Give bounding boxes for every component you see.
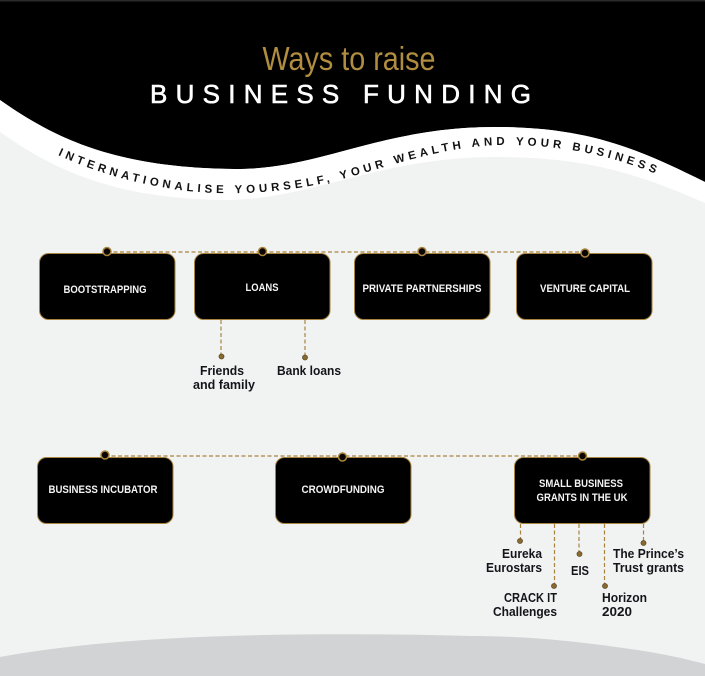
label: EIS: EIS	[571, 563, 589, 578]
label: Eureka Eurostars	[486, 546, 543, 575]
title: Ways to raise: Ways to raise	[262, 40, 436, 77]
box: Bootstrapping: BOOTSTRAPPING	[64, 284, 146, 296]
box: Bootstrapping	[40, 254, 175, 320]
connector lines	[105, 252, 644, 586]
label: Horizon 2020: 2020	[602, 604, 632, 619]
box: Small Business Grants in the UK: SMALL BUSINESS	[539, 478, 623, 490]
label: Friends and family: and family	[193, 377, 256, 392]
box: Private Partnerships: PRIVATE PARTNERSHIPS	[362, 283, 482, 295]
label: CRACK IT Challenges: CRACK IT	[504, 590, 557, 605]
white ribbon band	[0, 100, 705, 203]
box: Venture Capital	[516, 254, 652, 320]
box: Loans: LOANS	[246, 282, 278, 294]
box: Private Partnerships	[354, 254, 490, 320]
header black wave	[0, 0, 705, 182]
label: The Prince's Trust grants: Trust grants	[613, 560, 684, 575]
label: CRACK IT Challenges	[493, 590, 557, 619]
box: Crowdfunding	[276, 458, 411, 524]
box: Business Incubator	[38, 458, 173, 524]
title: Business Funding: BUSINESS FUNDING	[150, 79, 531, 109]
top connector dots	[101, 248, 589, 461]
bottom grey wave	[0, 634, 705, 676]
box: Small Business Grants in the UK	[514, 458, 650, 524]
label: Friends and family	[193, 363, 256, 392]
label: Eureka Eurostars: Eureka	[502, 546, 543, 561]
box: Crowdfunding: CROWDFUNDING	[302, 484, 384, 496]
label: Horizon 2020: Horizon	[602, 590, 647, 605]
label: The Prince's Trust grants: The Prince’s	[613, 546, 684, 561]
box: Loans	[194, 254, 330, 320]
label: Horizon 2020	[602, 590, 647, 619]
label: The Prince's Trust grants	[613, 546, 684, 575]
label: Bank loans: Bank loans	[277, 363, 341, 378]
label: CRACK IT Challenges: Challenges	[493, 604, 557, 619]
sub-item dots	[219, 354, 646, 588]
label: Eureka Eurostars: Eurostars	[486, 560, 542, 575]
box: Venture Capital: VENTURE CAPITAL	[540, 283, 630, 295]
box: Small Business Grants in the UK: GRANTS IN THE UK	[536, 492, 628, 504]
label: Friends and family: Friends	[200, 363, 244, 378]
box: Business Incubator: BUSINESS INCUBATOR	[48, 484, 158, 496]
curved tagline: INTERNATIONALISE YOURSELF, YOUR WEALTH AND YOUR BUSINESS	[58, 137, 657, 194]
